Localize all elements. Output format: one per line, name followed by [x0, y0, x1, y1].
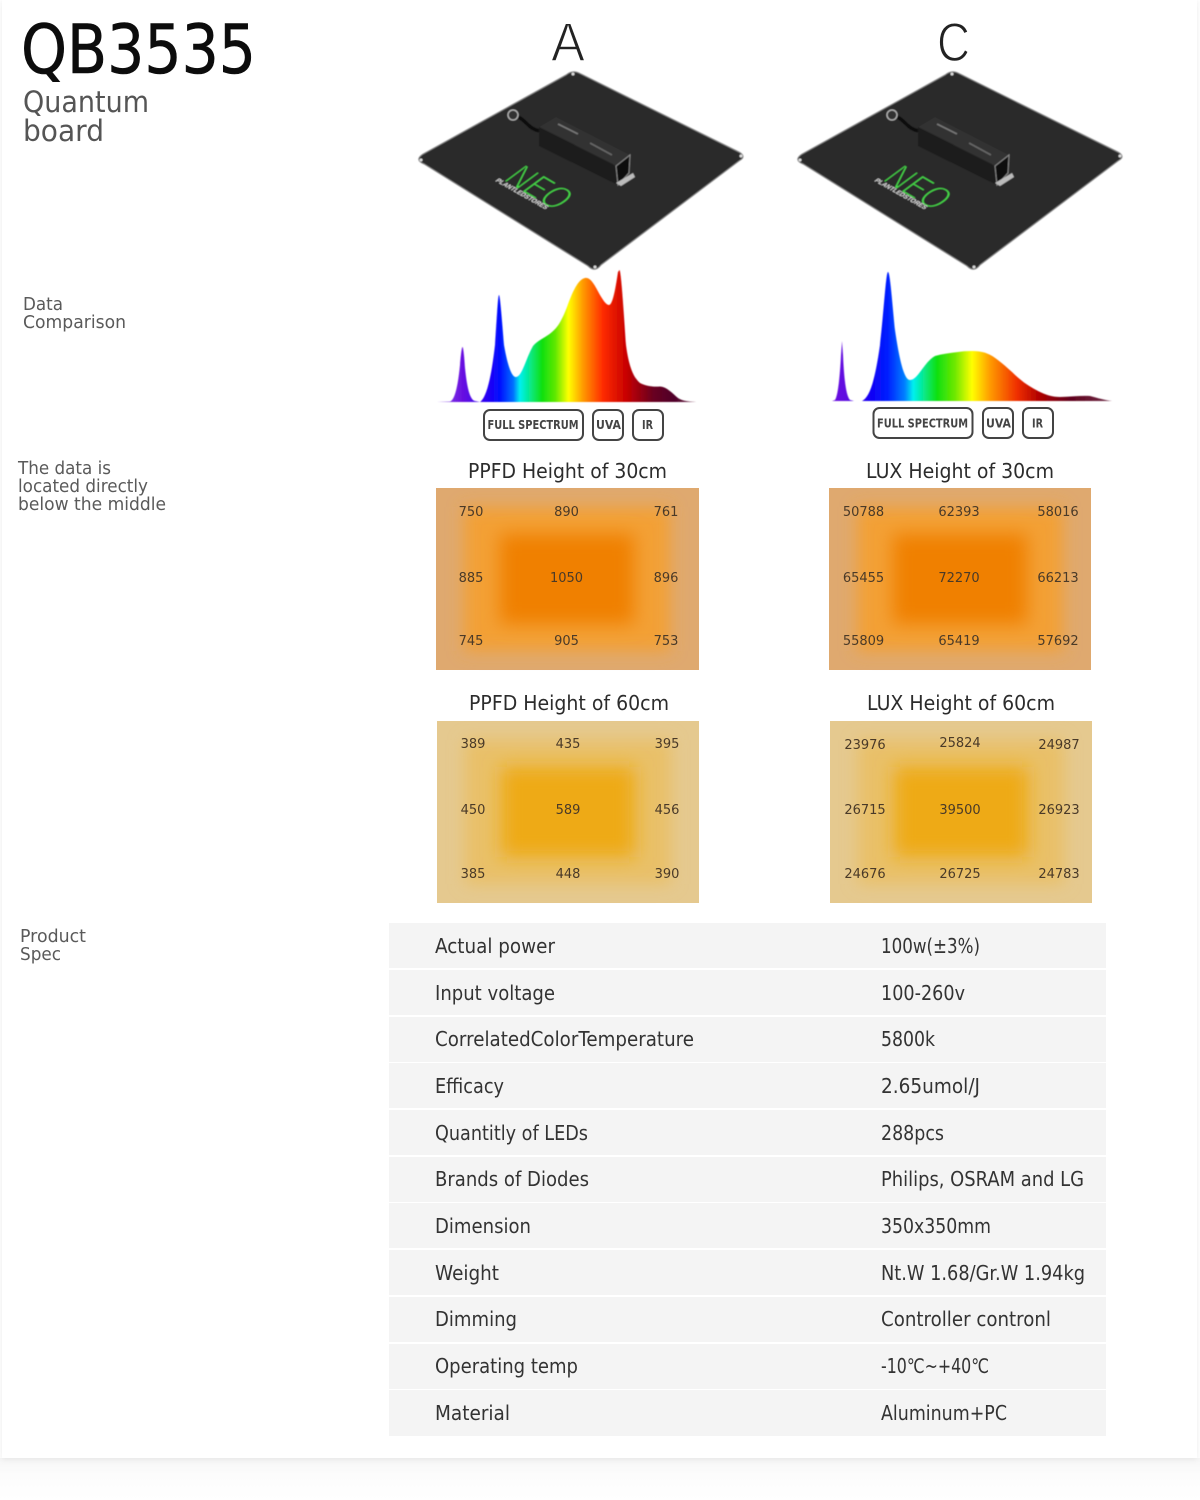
section label: data comparison: [23, 294, 126, 333]
heatmap: LUX 60cm: 26725: [939, 867, 981, 882]
section label: product spec: [20, 926, 86, 965]
spec table: 2.65umol/J: [881, 1074, 980, 1098]
heatmap: LUX 30cm: [829, 488, 1091, 670]
heatmap: PPFD 60cm: 450: [461, 803, 485, 818]
heatmap: PPFD 60cm: [437, 721, 699, 903]
heatmap: PPFD 60cm: 589: [556, 803, 580, 818]
spec table: Input voltage: [435, 981, 555, 1005]
heatmap: PPFD 30cm: 905: [554, 634, 579, 649]
column label A: A: [551, 11, 585, 73]
heatmap: PPFD 30cm: 1050: [550, 571, 583, 586]
heading: PPFD 60cm: PPFD Height of 60cm: [469, 691, 669, 715]
heatmap: PPFD 60cm: 390: [655, 867, 679, 882]
heading: LUX 60cm: LUX Height of 60cm: [867, 691, 1055, 715]
badges A: UVA: [596, 418, 622, 432]
subtitle: board: [23, 114, 104, 148]
column label C: C: [937, 11, 970, 73]
spectrum chart C: [832, 272, 1112, 401]
spec table: Nt.W 1.68/Gr.W 1.94kg: [881, 1261, 1085, 1285]
spec table: Brands of Diodes: [435, 1167, 589, 1191]
product image: board A: PLANTLEDSTORES: [493, 178, 550, 211]
heatmap: LUX 60cm: 24676: [844, 867, 886, 882]
heatmap: PPFD 60cm: 389: [461, 737, 485, 752]
spec table: Material: [435, 1401, 510, 1425]
subtitle: Quantum: [23, 85, 149, 119]
heatmap: PPFD 60cm: 385: [461, 867, 485, 882]
spec table: Efficacy: [435, 1074, 504, 1098]
spec table: 288pcs: [881, 1121, 944, 1145]
spec table: CorrelatedColorTemperature: [435, 1027, 694, 1051]
heatmap: PPFD 30cm: 761: [654, 505, 678, 520]
heatmap: PPFD 30cm: 750: [459, 505, 483, 520]
heatmap: LUX 30cm: 62393: [938, 505, 980, 520]
subtitle: [23, 85, 149, 148]
heatmap: PPFD 60cm: 435: [556, 737, 580, 752]
section label: data comparison: Data: [23, 294, 63, 315]
heatmap: LUX 60cm: 25824: [939, 736, 981, 751]
heatmap: LUX 30cm: 65455: [843, 571, 884, 586]
heatmap: PPFD 60cm: 456: [655, 803, 679, 818]
heading: LUX 30cm: LUX Height of 30cm: [866, 459, 1054, 483]
spec table: Philips, OSRAM and LG: [881, 1167, 1084, 1191]
heatmap: LUX 30cm: 65419: [938, 634, 980, 649]
section label: product spec: Product: [20, 926, 86, 947]
heatmap: PPFD 30cm: 890: [554, 505, 579, 520]
spec table: [389, 923, 1106, 1436]
badges C: [874, 408, 1053, 438]
heatmap: LUX 60cm: 24783: [1038, 867, 1080, 882]
spec table: Dimming: [435, 1307, 517, 1331]
product image: board C: PLANTLEDSTORES: [872, 178, 929, 211]
spec table: -10℃~+40℃: [881, 1354, 989, 1378]
heatmap: PPFD 60cm: 395: [655, 737, 679, 752]
heatmap: LUX 60cm: [830, 721, 1092, 903]
heatmap: PPFD 60cm: 448: [556, 867, 580, 882]
heading: PPFD 30cm: PPFD Height of 30cm: [468, 459, 667, 483]
heatmap: LUX 30cm: 57692: [1037, 634, 1079, 649]
spec table: Actual power: [435, 934, 556, 958]
badges A: [484, 410, 663, 440]
spec table: Aluminum+PC: [881, 1401, 1007, 1425]
badges A: IR: [642, 418, 653, 432]
heatmap: LUX 60cm: 26923: [1038, 803, 1080, 818]
note: data location: The data is: [17, 458, 111, 479]
heatmap: LUX 30cm: 66213: [1037, 571, 1079, 586]
spec table: Quantitly of LEDs: [435, 1121, 588, 1145]
heatmap: PPFD 30cm: [436, 488, 699, 670]
heatmap: LUX 30cm: 58016: [1037, 505, 1079, 520]
spec table: 5800k: [881, 1027, 935, 1051]
spec table: 100w(±3%): [881, 934, 980, 958]
heatmap: LUX 60cm: 24987: [1038, 738, 1080, 753]
product image: board A: NEO: [495, 159, 583, 216]
spec table: Operating temp: [435, 1354, 578, 1378]
badges C: FULL SPECTRUM: [877, 416, 968, 430]
heatmap: LUX 30cm: 50788: [843, 505, 884, 520]
note: data location: below the middle: [18, 494, 166, 515]
badges A: FULL SPECTRUM: [488, 418, 578, 432]
heatmap: LUX 60cm: 26715: [844, 803, 886, 818]
title: QB3535: [21, 11, 256, 90]
heatmap: LUX 30cm: 55809: [843, 634, 884, 649]
spec table: 100-260v: [881, 981, 965, 1005]
product image: board A: [419, 72, 743, 269]
badges C: IR: [1032, 416, 1043, 430]
spectrum chart A: [437, 270, 700, 402]
heatmap: LUX 30cm: 72270: [938, 571, 980, 586]
product image: board C: NEO: [874, 159, 962, 216]
section label: product spec: Spec: [20, 944, 61, 965]
heatmap: PPFD 30cm: 896: [654, 571, 678, 586]
spec table: Dimension: [435, 1214, 531, 1238]
section label: data comparison: Comparison: [23, 312, 126, 333]
badges C: UVA: [986, 416, 1012, 430]
note: data location: located directly: [18, 476, 148, 497]
spec table: 350x350mm: [881, 1214, 991, 1238]
heatmap: LUX 60cm: 23976: [844, 738, 886, 753]
product image: board C: [798, 72, 1122, 269]
heatmap: PPFD 30cm: 753: [654, 634, 678, 649]
heatmap: PPFD 30cm: 885: [459, 571, 483, 586]
spec table: Controller contronl: [881, 1307, 1051, 1331]
heatmap: PPFD 30cm: 745: [459, 634, 483, 649]
note: data location: [17, 458, 166, 515]
heatmap: LUX 60cm: 39500: [939, 803, 981, 818]
spec table: Weight: [435, 1261, 499, 1285]
